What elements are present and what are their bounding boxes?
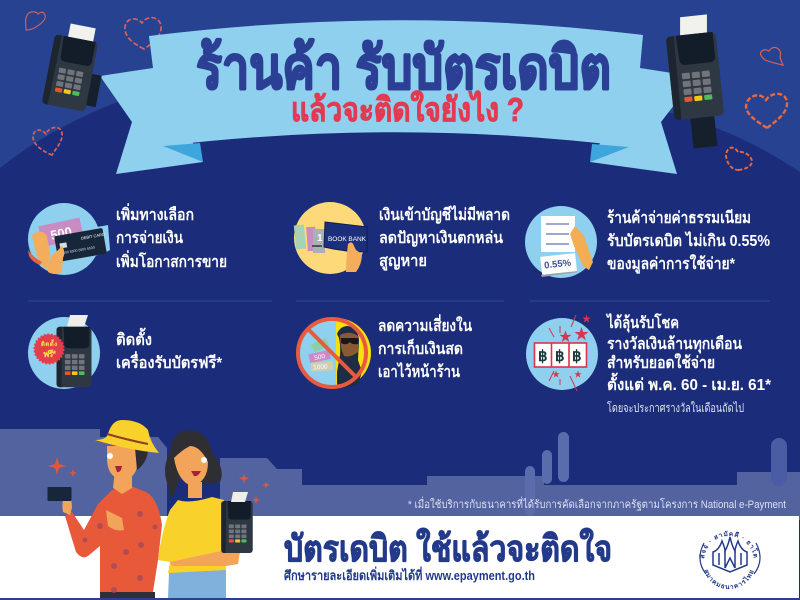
text: สูญหาย: [379, 253, 427, 272]
title: ร้านค้า รับบัตรเดบิต: [196, 36, 611, 101]
pants: [168, 570, 226, 598]
shirt dots: [82, 511, 158, 593]
person: woman with terminal: [158, 430, 253, 598]
text: เพิ่มโอกาสการขาย: [116, 250, 227, 271]
icon: card and banknote: 5500 5500 5500 5500: [61, 246, 95, 255]
subtitle: แล้วจะติดใจยังไง ?: [291, 90, 524, 128]
text: ได้ลุ้นรับโชค: [605, 312, 679, 333]
icon: fee document: [525, 206, 597, 278]
icon: slot machine: ★: [574, 326, 589, 343]
icon: slot machine: ★: [559, 329, 572, 344]
panel: no missed deposits: [294, 202, 510, 274]
heart: right speech bubble: [760, 47, 783, 65]
panel: reduce cash risk: [297, 314, 472, 388]
text: เครื่องรับบัตรฟรี*: [116, 351, 223, 372]
text: เงินเข้าบัญชีไม่มีพลาด: [379, 205, 510, 225]
icon: no thief: [297, 318, 371, 388]
panel: prize draw: [526, 312, 772, 415]
arm: [170, 550, 240, 566]
footer website: ศึกษารายละเอียดเพิ่มเติมได้ที่ www.epayment.go.th: [284, 566, 535, 583]
footer band: [0, 516, 800, 600]
pants: [100, 592, 155, 598]
terminal: [221, 501, 253, 553]
text: ติดตั้ง: [116, 327, 152, 349]
person: man with hat: [48, 420, 162, 598]
text: สำหรับยอดใช้จ่าย: [607, 353, 715, 372]
shirt: [158, 497, 226, 573]
heart: dashed top left: [125, 18, 161, 49]
text: เอาไว้หน้าร้าน: [378, 362, 460, 381]
text: รับบัตรเดบิต ไม่เกิน 0.55%: [607, 231, 770, 250]
heart: left speech bubble: [26, 12, 45, 30]
logo: Thai Bankers Association: [699, 530, 761, 590]
ribbon banner: [100, 20, 678, 174]
panel: fee under 0.55%: [525, 206, 770, 278]
text: ของมูลค่าการใช้จ่าย*: [607, 254, 736, 275]
shirt: [65, 486, 162, 598]
eye: [107, 453, 113, 459]
icon: slot machine: ฿: [555, 348, 565, 365]
logo: Thai Bankers Association: สมาคมธนาคารไทย: [704, 569, 754, 590]
logo: Thai Bankers Association: สัจจ์ · สามัคคี · ธาโต: [699, 530, 758, 558]
icon: book bank: 1: [317, 233, 323, 244]
text: โดยจะประกาศรางวัลในเดือนถัดไป: [607, 401, 744, 415]
divider lines: [28, 300, 770, 302]
skyline: [0, 429, 800, 520]
heart: dashed right big: [746, 94, 787, 128]
icon: free terminal: [28, 315, 100, 389]
icon: book bank: [294, 202, 367, 274]
icon: slot machine: ฿: [572, 348, 582, 365]
icon: free terminal: ฟรี*: [43, 349, 56, 359]
head: [107, 446, 138, 479]
text: [379, 205, 510, 272]
icon: card and banknote: DEBIT CARD: [80, 232, 105, 241]
face: [174, 446, 208, 486]
icon: card and banknote: [28, 203, 110, 275]
sparkles: [48, 457, 270, 504]
icon: free terminal: ติดตั้ง: [41, 338, 57, 348]
text: เพิ่มทางเลือก: [116, 203, 194, 224]
heart: dashed lower left: [33, 127, 62, 155]
icon: slot machine: ★: [574, 370, 582, 379]
text: รางวัลเงินล้านทุกเดือน: [607, 335, 742, 354]
icon: no thief: 500: [314, 353, 326, 362]
arm and hand: [62, 494, 72, 515]
icon: book bank: BOOK BANK: [328, 236, 367, 243]
icon: slot machine: [526, 314, 598, 391]
icon: slot machine: ★: [582, 314, 591, 324]
footer slogan: บัตรเดบิต ใช้แล้วจะติดใจ: [284, 527, 612, 569]
card terminal left: [42, 21, 110, 114]
mouth: [115, 466, 122, 472]
icon: slot machine: ฿: [538, 348, 548, 365]
hair: [165, 430, 222, 500]
heart: dashed right lower: [726, 148, 752, 170]
text: [605, 312, 772, 415]
panel: more payment options: [28, 203, 227, 275]
text: ลดความเสี่ยงใน: [378, 314, 472, 335]
icon: no thief: 1000: [313, 363, 328, 371]
mouth: [191, 471, 201, 476]
text: ร้านค้าจ่ายค่าธรรมเนียม: [607, 208, 751, 227]
neck: [188, 482, 202, 498]
text: [116, 327, 223, 372]
text: การจ่ายเงิน: [116, 229, 183, 247]
text: [116, 203, 227, 271]
hair: [135, 448, 148, 470]
card terminal right: [664, 14, 727, 150]
text: ตั้งแต่ พ.ค. 60 - เม.ย. 61*: [607, 372, 772, 394]
icon: fee document: 0.55%: [544, 258, 572, 271]
text: ลดปัญหาเงินตกหล่น: [379, 229, 503, 248]
text: การเก็บเงินสด: [378, 337, 463, 358]
receipt: [231, 492, 248, 502]
hat: [95, 420, 159, 453]
neck: [113, 470, 132, 494]
eye: [201, 457, 207, 463]
panel: free terminal: [28, 315, 223, 389]
text: [607, 208, 770, 275]
icon: slot machine: ★: [552, 370, 560, 379]
icon: card and banknote: 500: [49, 224, 73, 243]
card: [48, 487, 72, 501]
text: [378, 314, 472, 381]
